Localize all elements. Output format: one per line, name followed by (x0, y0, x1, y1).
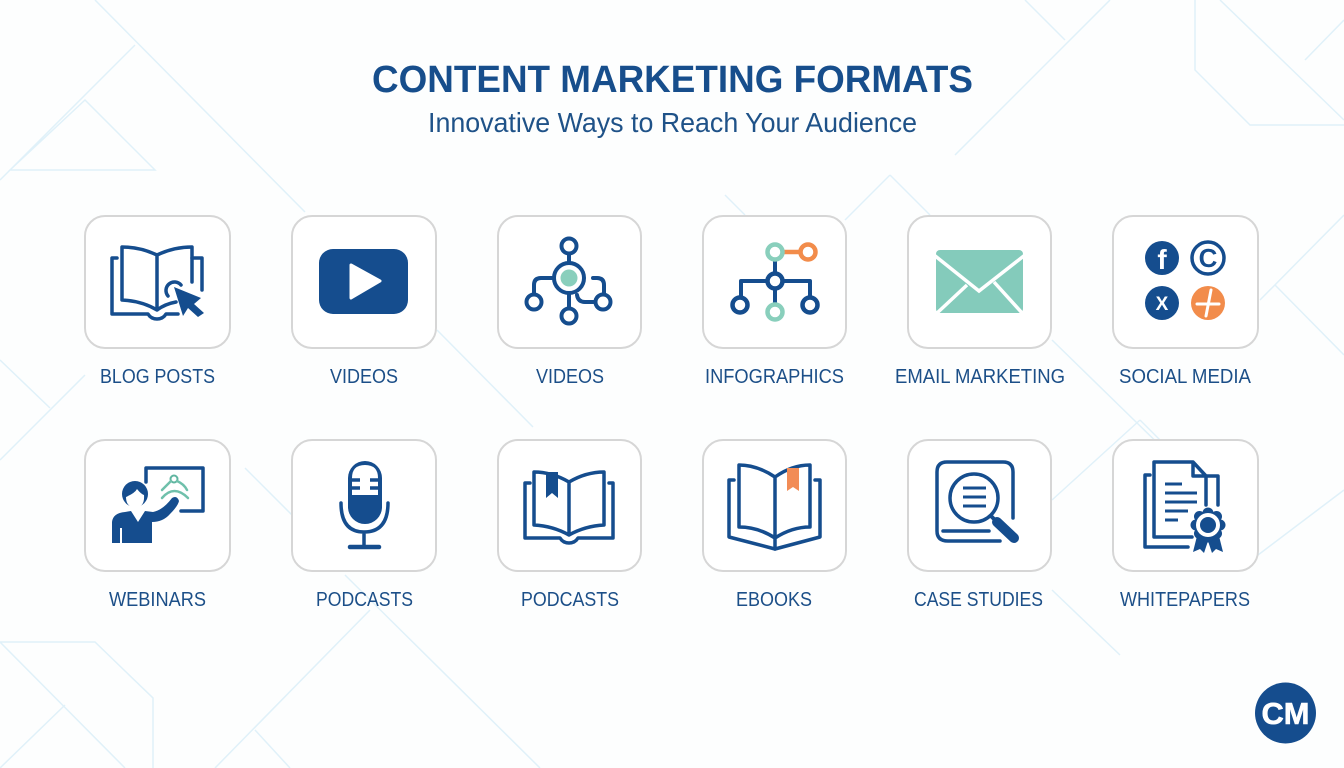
panel: email marketing (895, 216, 1065, 388)
panel: infographics (703, 216, 846, 388)
label: CASE STUDIES (914, 589, 1043, 611)
label: VIDEOS (536, 366, 604, 388)
icon: book with cursor (112, 247, 204, 319)
icon: presenter at board (112, 468, 203, 543)
panel: videos (292, 216, 436, 388)
icon: social circles: f (1157, 244, 1167, 275)
icon: network nodes (526, 238, 610, 324)
icon: book with orange bookmark (729, 465, 820, 549)
icon: hierarchy diagram (732, 244, 818, 320)
icon: social circles (1145, 241, 1225, 320)
panel: webinars (85, 440, 230, 611)
panel: podcasts microphone (292, 440, 436, 611)
icon: book with navy bookmark (525, 472, 613, 543)
label: PODCASTS (316, 589, 413, 611)
icon: social circles: C (1199, 243, 1218, 273)
panel: blog posts (85, 216, 230, 388)
panel: whitepapers (1113, 440, 1258, 611)
panel: videos network (498, 216, 641, 388)
label: BLOG POSTS (100, 366, 215, 388)
logo badge (1255, 682, 1316, 744)
icon: documents with badge (1145, 462, 1226, 553)
subtitle: Innovative Ways to Reach Your Audience (428, 107, 917, 138)
label: WHITEPAPERS (1120, 589, 1250, 611)
icon: microphone (341, 461, 388, 547)
title: CONTENT MARKETING FORMATS (372, 59, 973, 101)
label: VIDEOS (330, 366, 398, 388)
label: INFOGRAPHICS (705, 366, 844, 388)
label: SOCIAL MEDIA (1119, 366, 1252, 388)
icon: play button (319, 249, 408, 314)
label: EMAIL MARKETING (895, 366, 1065, 388)
panel: case studies (908, 440, 1051, 611)
icon: book with magnifier (937, 462, 1014, 541)
label: EBOOKS (736, 589, 812, 611)
panel: ebooks (703, 440, 846, 611)
label: PODCASTS (521, 589, 619, 611)
panel: social media (1113, 216, 1258, 388)
panel: podcasts book (498, 440, 641, 611)
icon: envelope (934, 250, 1025, 314)
icon: social circles: X (1156, 294, 1169, 315)
logo badge: CM (1262, 696, 1310, 731)
label: WEBINARS (109, 589, 206, 611)
